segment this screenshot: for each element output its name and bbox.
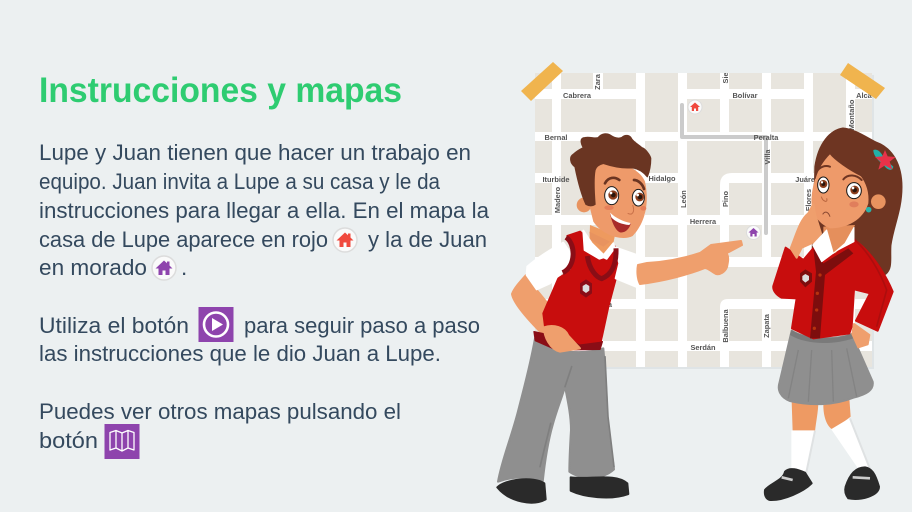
text block: play instructions: para seguir paso a paso bbox=[244, 313, 480, 338]
text block: introduction: instrucciones para llegar a ella. En el mapa la bbox=[39, 198, 489, 223]
text block: introduction: equipo. Juan invita a Lupe a su casa y le da bbox=[39, 169, 440, 194]
Lupe skirt bbox=[779, 330, 873, 404]
text block: play instructions: Utiliza el botón bbox=[39, 313, 189, 338]
street labels: Ortiz bbox=[795, 300, 812, 309]
street labels: Alcalá bbox=[856, 91, 879, 100]
street labels: Juárez bbox=[795, 175, 819, 184]
Lupe head bbox=[791, 128, 896, 262]
Juan pointing arm bbox=[637, 241, 742, 284]
text block: play instructions: las instrucciones que le dio Juan a Lupe. bbox=[39, 341, 441, 366]
street labels: Sierra bbox=[721, 62, 730, 83]
street labels: Bernal bbox=[544, 133, 568, 142]
icon: red house bbox=[333, 228, 357, 252]
text block: play instructions bbox=[39, 313, 480, 366]
street labels bbox=[542, 62, 879, 352]
Juan torso and arms bbox=[512, 225, 646, 352]
text block: introduction: casa de Lupe aparece en rojo bbox=[39, 227, 328, 252]
street labels: Iturbide bbox=[542, 175, 570, 184]
character: Lupe bbox=[765, 128, 902, 500]
text block: introduction: en morado bbox=[39, 255, 147, 280]
character: Juan bbox=[497, 134, 742, 503]
Juan trousers and shoes bbox=[497, 338, 628, 503]
street labels: Herrera bbox=[690, 217, 717, 226]
title: Instrucciones y mapas bbox=[39, 71, 402, 110]
street labels: Pino bbox=[721, 191, 730, 207]
icon: map button bbox=[104, 424, 140, 459]
street labels: Villa bbox=[763, 149, 772, 165]
text block: introduction: . bbox=[181, 255, 187, 280]
street labels: Rosa bbox=[594, 300, 613, 309]
Lupe legs and socks bbox=[765, 398, 879, 500]
tape: right bbox=[840, 63, 885, 99]
street labels: Bolívar bbox=[732, 91, 758, 100]
text block: other maps: Puedes ver otros mapas pulsando el bbox=[39, 399, 401, 424]
text block: introduction: y la de Juan bbox=[368, 227, 487, 252]
icon: purple house bbox=[152, 256, 176, 280]
tape: left bbox=[521, 62, 563, 101]
route line bbox=[682, 105, 766, 233]
street labels: León bbox=[679, 190, 688, 208]
text block: introduction: Lupe y Juan tienen que hacer un trabajo en bbox=[39, 140, 471, 165]
street labels: Flores bbox=[804, 189, 813, 211]
street labels: Hidalgo bbox=[648, 174, 676, 183]
map marker: red house bbox=[688, 100, 702, 114]
Juan head bbox=[571, 134, 651, 247]
Lupe sweater bbox=[773, 238, 893, 347]
Lupe back hair bbox=[812, 128, 902, 288]
street labels: Zapata bbox=[762, 313, 771, 338]
map marker: purple house bbox=[746, 226, 760, 240]
street labels: Montaño bbox=[847, 99, 856, 130]
street labels: Zara bbox=[593, 73, 602, 90]
text block: other maps: botón bbox=[39, 428, 98, 453]
map poster bbox=[535, 62, 879, 369]
street labels: Balbuena bbox=[721, 308, 730, 343]
street labels: Cabrera bbox=[563, 91, 592, 100]
street labels: Peralta bbox=[754, 133, 779, 142]
street labels: Serdán bbox=[690, 343, 716, 352]
text block: other maps bbox=[39, 399, 401, 453]
text block: introduction bbox=[39, 140, 489, 280]
icon: play button bbox=[198, 307, 234, 342]
street labels: Madero bbox=[553, 186, 562, 213]
